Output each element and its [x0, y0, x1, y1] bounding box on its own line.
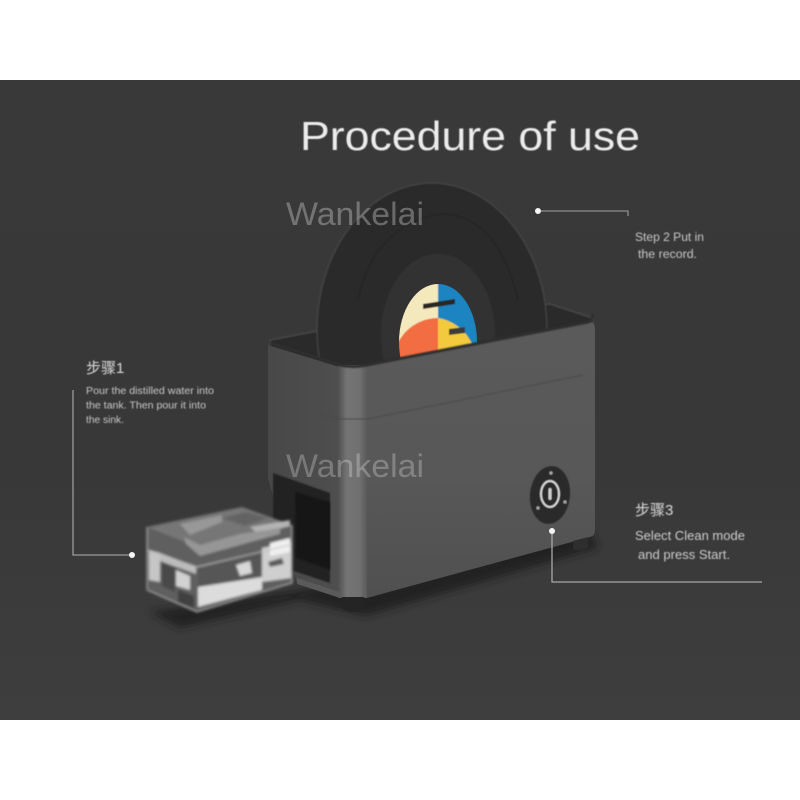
front bright band: [198, 577, 262, 607]
tank lid top: [147, 507, 292, 547]
body seam: [320, 375, 583, 419]
vinyl record: [316, 184, 548, 358]
machine body: [268, 314, 595, 612]
callout line: step 1: [73, 390, 135, 558]
watermark: lower: Wankelai: [286, 448, 424, 484]
callout line: step 3: [549, 528, 762, 582]
text block: step 2: the record.: [638, 249, 697, 261]
rim edge: [270, 314, 593, 366]
record label: [399, 284, 477, 358]
bubble highlights: [236, 561, 252, 576]
front foot: [342, 597, 364, 612]
tank outline body: [147, 507, 292, 612]
callout line: step 2: [535, 208, 628, 216]
tank slot: [273, 473, 330, 583]
front face: [367, 322, 595, 598]
text block: step 2: Step 2 Put in: [635, 232, 704, 244]
dark background panel: [0, 80, 800, 720]
slot inner shade: [295, 492, 330, 570]
slot lower lip: [297, 578, 340, 598]
bright right bar: [262, 542, 291, 582]
text block: step 1: the tank. Then pour it into: [86, 400, 206, 412]
tank edges: [147, 525, 292, 612]
text block: step 1: [86, 360, 214, 426]
text block: step 1: Pour the distilled water into: [86, 386, 214, 397]
infographic: procedure of use: [0, 80, 800, 720]
text block: step 1: 步骤1: [86, 360, 124, 377]
water tank: [147, 507, 292, 612]
text block: step 3: 步骤3: [635, 502, 673, 519]
text block: step 2: [635, 232, 704, 261]
rear foot: [573, 537, 588, 551]
lid mottling: [180, 515, 222, 535]
machine rear rim: [270, 304, 593, 372]
text block: step 3: [635, 502, 745, 562]
record disc: [316, 184, 548, 357]
title: Procedure of use: [300, 113, 640, 159]
text block: step 3: and press Start.: [638, 547, 730, 562]
watermark: upper: Wankelai: [286, 196, 424, 232]
control dial: [527, 464, 573, 526]
rounded corner highlight: [338, 365, 367, 598]
front dark band: [198, 553, 262, 590]
machine shadow on floor: [150, 530, 598, 628]
text block: step 3: Select Clean mode: [635, 528, 745, 543]
left face: [268, 345, 340, 598]
left bright patch: [149, 550, 160, 582]
text block: step 1: the sink.: [86, 415, 124, 426]
